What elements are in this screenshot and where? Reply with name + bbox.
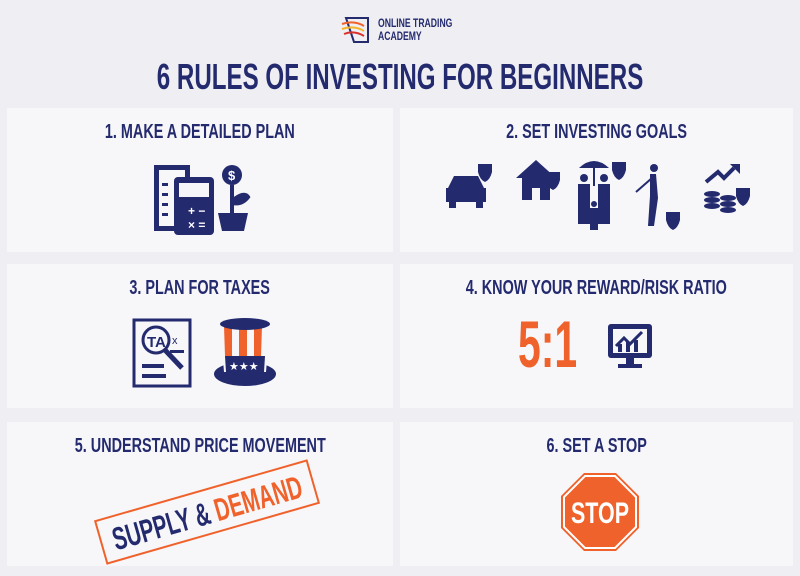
title: 6 RULES OF INVESTING FOR BEGINNERS: [157, 56, 643, 97]
heading 4: 4. KNOW YOUR REWARD/RISK RATIO: [466, 277, 727, 299]
icon: tax document: x: [172, 335, 178, 347]
icon: calculator plan: [154, 165, 250, 235]
logo: ONLINE TRADING: [378, 16, 452, 30]
heading 2: 2. SET INVESTING GOALS: [506, 121, 687, 143]
panel: 4 ratio: [400, 264, 793, 408]
icon: stop sign: [561, 473, 639, 551]
panel: 2 goals: [400, 108, 793, 252]
icon: monitor chart: [608, 324, 652, 368]
heading 6: 6. SET A STOP: [546, 435, 647, 457]
icon: calculator plan: + −: [188, 204, 205, 218]
heading 1: 1. MAKE A DETAILED PLAN: [105, 121, 295, 143]
icon: tax document: TA: [147, 334, 166, 351]
icon: uncle sam hat: [214, 318, 276, 386]
panel: 5 supply demand: [7, 422, 393, 566]
icon: calculator plan: × =: [188, 218, 205, 232]
icon: tax document: [132, 318, 192, 388]
icon: calculator plan: $: [228, 168, 236, 183]
panel: 1 plan: [7, 108, 393, 252]
icon: uncle sam hat: ★★★: [229, 361, 259, 373]
icons: goals: [446, 160, 750, 230]
heading 5: 5. UNDERSTAND PRICE MOVEMENT: [75, 435, 325, 457]
text: 5:1: 5:1: [518, 307, 577, 381]
panel: 3 taxes: [7, 264, 393, 408]
heading 3: 3. PLAN FOR TAXES: [130, 277, 270, 299]
logo: [342, 16, 452, 43]
logo: ACADEMY: [378, 29, 422, 43]
panel: 6 stop: [400, 422, 793, 566]
